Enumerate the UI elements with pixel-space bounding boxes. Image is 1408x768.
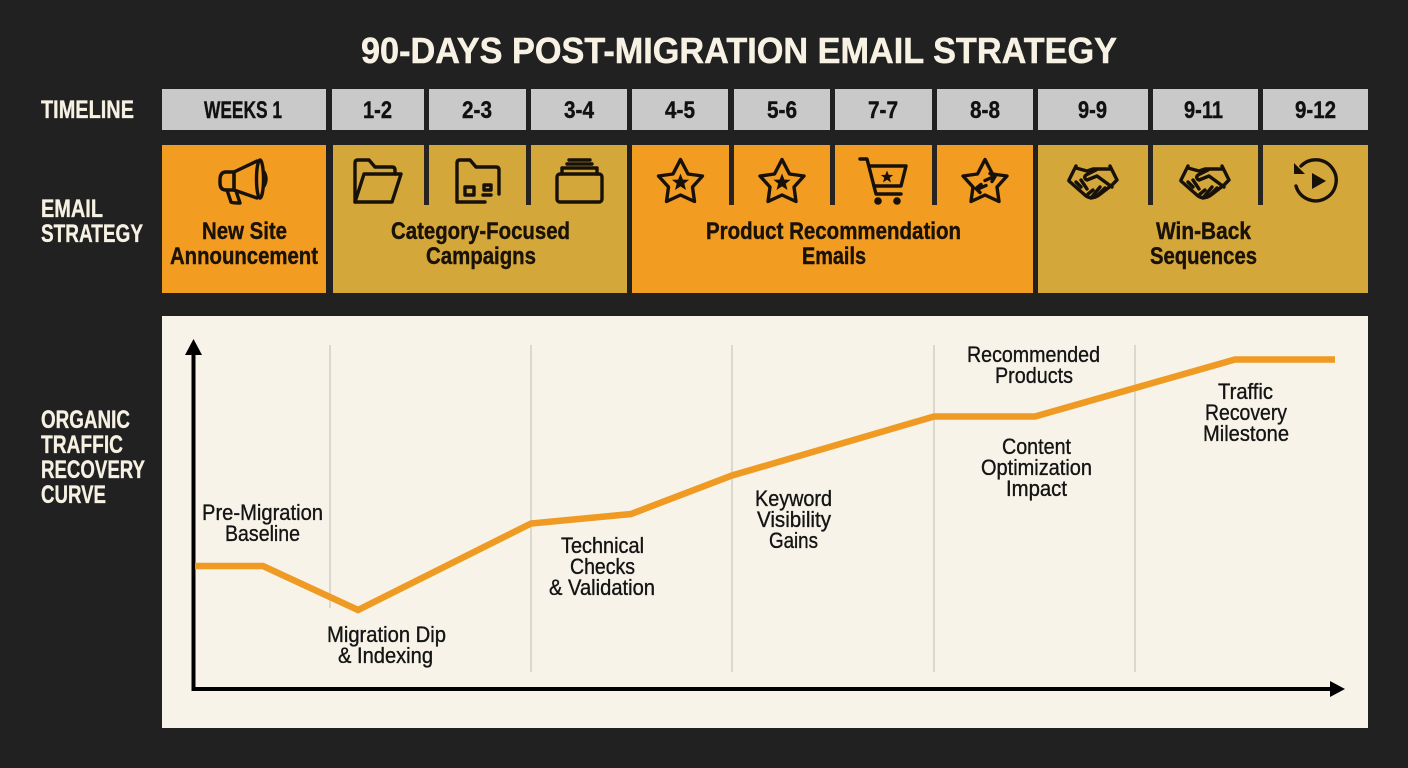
week cell: weeks 1 xyxy=(162,89,326,130)
label: pre-migration baseline: Baseline xyxy=(225,521,300,546)
label: category-focused campaigns xyxy=(391,218,570,270)
label: recommended products: Recommended xyxy=(967,342,1100,367)
row label: timeline: TIMELINE xyxy=(41,96,134,124)
week cell: 9-11: 9-11 xyxy=(1184,97,1223,124)
row label: email strategy: STRATEGY xyxy=(41,220,143,248)
week cell: 3-4 xyxy=(531,89,627,130)
label: traffic recovery milestone xyxy=(1203,379,1289,446)
label: pre-migration baseline: Pre-Migration xyxy=(202,500,323,525)
label: win-back sequences: Win-Back xyxy=(1156,218,1252,245)
y axis arrow xyxy=(185,339,202,691)
icon: star xyxy=(760,160,804,202)
week cell: 9-12 xyxy=(1263,89,1368,130)
week cell: 8-8 xyxy=(937,89,1033,130)
label: traffic recovery milestone: Recovery xyxy=(1205,400,1287,425)
row label: organic traffic recovery curve: ORGANIC xyxy=(41,406,130,434)
label: technical checks and validation: Technical xyxy=(561,533,644,558)
label: win-back sequences xyxy=(1150,218,1257,270)
icon: handshake xyxy=(1069,166,1117,198)
panel: recovery chart xyxy=(162,316,1368,728)
week cell: 9-11 xyxy=(1153,89,1258,130)
week cell: 9-9 xyxy=(1038,89,1148,130)
label: product recommendation emails: Emails xyxy=(802,243,866,270)
week cell: 7-7 xyxy=(835,89,932,130)
label: technical checks and validation: & Validation xyxy=(549,575,655,600)
icon: handshake xyxy=(1181,166,1229,198)
icon: star with exchange arrows xyxy=(963,160,1007,202)
label: content optimization impact: Impact xyxy=(1006,476,1067,501)
label: keyword visibility gains: Gains xyxy=(769,528,818,553)
row label: organic traffic recovery curve: TRAFFIC xyxy=(41,431,123,459)
label: product recommendation emails xyxy=(706,218,961,270)
week cell: weeks 1: WEEKS 1 xyxy=(204,97,282,124)
week cell: 7-7: 7-7 xyxy=(868,97,898,124)
label: new site announcement: Announcement xyxy=(170,243,318,270)
label: technical checks and validation: Checks xyxy=(570,554,635,579)
week cell: 9-12: 9-12 xyxy=(1295,97,1336,124)
label: content optimization impact: Content xyxy=(1002,434,1071,459)
label: category-focused campaigns: Category-Focused xyxy=(391,218,570,245)
week cell: 4-5 xyxy=(632,89,728,130)
row label: organic traffic recovery curve: RECOVERY xyxy=(41,456,145,484)
label: technical checks and validation xyxy=(549,533,655,600)
x axis arrow xyxy=(192,681,1345,697)
label: product recommendation emails: Product Recommendation xyxy=(706,218,961,245)
label: recommended products xyxy=(967,342,1100,388)
label: category-focused campaigns: Campaigns xyxy=(426,243,536,270)
label: pre-migration baseline xyxy=(202,500,323,546)
label: new site announcement: New Site xyxy=(202,218,287,245)
title: 90-DAYS POST-MIGRATION EMAIL STRATEGY xyxy=(361,30,1117,71)
week cell: 1-2: 1-2 xyxy=(363,97,392,124)
icon: shopping cart with star xyxy=(860,159,906,205)
week cell: 1-2 xyxy=(332,89,424,130)
week cell: 5-6 xyxy=(734,89,830,130)
label: migration dip and indexing xyxy=(327,622,446,668)
panel: win-back sequences xyxy=(1038,145,1368,293)
week cell: 5-6: 5-6 xyxy=(767,97,797,124)
row label: organic traffic recovery curve: CURVE xyxy=(41,481,106,509)
panel: product recommendation emails xyxy=(632,145,1033,293)
icon: replay xyxy=(1294,160,1336,201)
label: recommended products: Products xyxy=(995,363,1073,388)
label: migration dip and indexing: Migration Dip xyxy=(327,622,446,647)
row label: email strategy: EMAIL xyxy=(41,195,103,223)
label: keyword visibility gains xyxy=(755,486,832,553)
week cell: 9-9: 9-9 xyxy=(1078,97,1107,124)
icon: star xyxy=(658,160,702,202)
label: keyword visibility gains: Keyword xyxy=(755,486,832,511)
label: content optimization impact: Optimization xyxy=(981,455,1092,480)
week cell: 4-5: 4-5 xyxy=(665,97,695,124)
label: traffic recovery milestone: Traffic xyxy=(1218,379,1273,404)
label: migration dip and indexing: & Indexing xyxy=(338,643,433,668)
row label: organic traffic recovery curve xyxy=(41,406,145,509)
week cell: 2-3 xyxy=(429,89,526,130)
timeline row xyxy=(162,89,1368,130)
icon: megaphone xyxy=(220,160,266,203)
row label: email strategy xyxy=(41,195,143,248)
week cell: 2-3: 2-3 xyxy=(462,97,492,124)
icon: folder with document xyxy=(457,160,499,202)
label: traffic recovery milestone: Milestone xyxy=(1203,421,1289,446)
icon: open folder xyxy=(355,160,401,202)
icon: stacked folders xyxy=(557,160,602,202)
label: content optimization impact xyxy=(981,434,1092,501)
panel: new site announcement xyxy=(162,145,326,293)
panel: category-focused campaigns xyxy=(333,145,627,293)
label: keyword visibility gains: Visibility xyxy=(757,507,831,532)
week cell: 8-8: 8-8 xyxy=(970,97,1000,124)
label: win-back sequences: Sequences xyxy=(1150,243,1257,270)
recovery curve line xyxy=(195,360,1335,610)
label: new site announcement xyxy=(170,218,318,270)
week cell: 3-4: 3-4 xyxy=(564,97,595,124)
